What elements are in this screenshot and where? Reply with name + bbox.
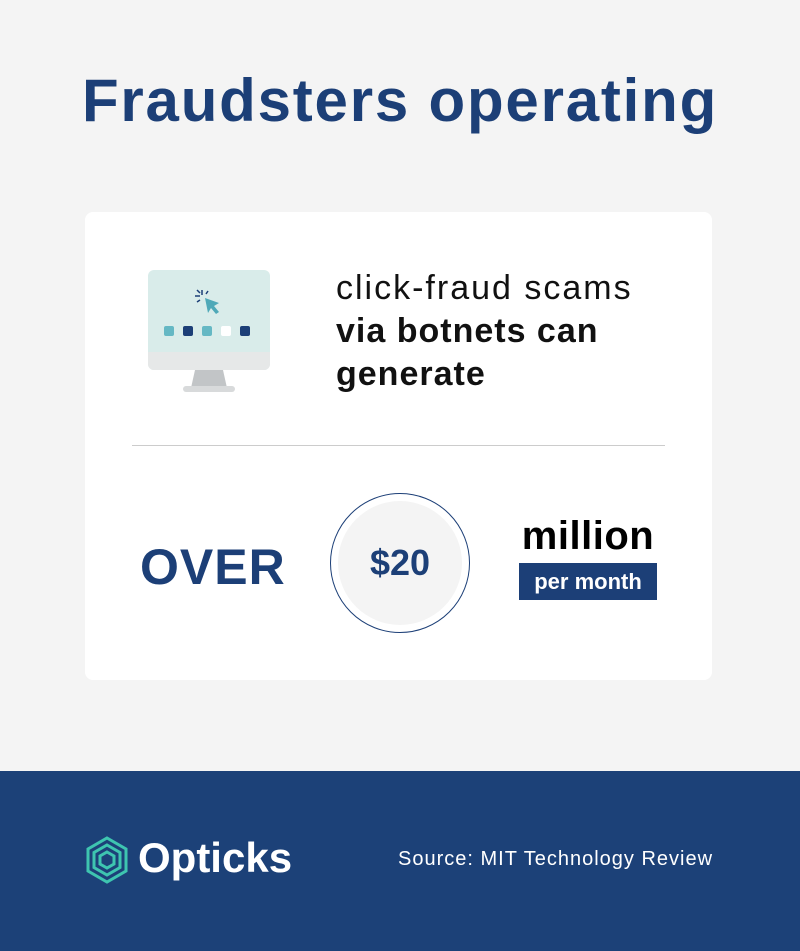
text block: description: via botnets can bbox=[336, 312, 599, 350]
icon: Opticks logo bbox=[86, 836, 128, 884]
footer bbox=[0, 771, 800, 951]
icon: monitor with cursor bbox=[148, 270, 270, 392]
text: million per month bbox=[519, 514, 657, 600]
text: OVER: OVER bbox=[140, 539, 286, 595]
panel: stat card bbox=[85, 212, 712, 680]
source: Source: MIT Technology Review bbox=[398, 848, 713, 870]
text: million per month: million bbox=[522, 514, 654, 558]
text block: description: generate bbox=[336, 355, 486, 393]
text block: description: click-fraud scams bbox=[336, 269, 633, 307]
logo text: Opticks bbox=[138, 834, 292, 881]
circle: $20: $20 bbox=[370, 542, 430, 583]
title: Fraudsters operating bbox=[82, 67, 718, 134]
circle: $20 bbox=[330, 493, 470, 633]
text: million per month: per month bbox=[534, 569, 642, 594]
text block: description bbox=[336, 269, 633, 393]
